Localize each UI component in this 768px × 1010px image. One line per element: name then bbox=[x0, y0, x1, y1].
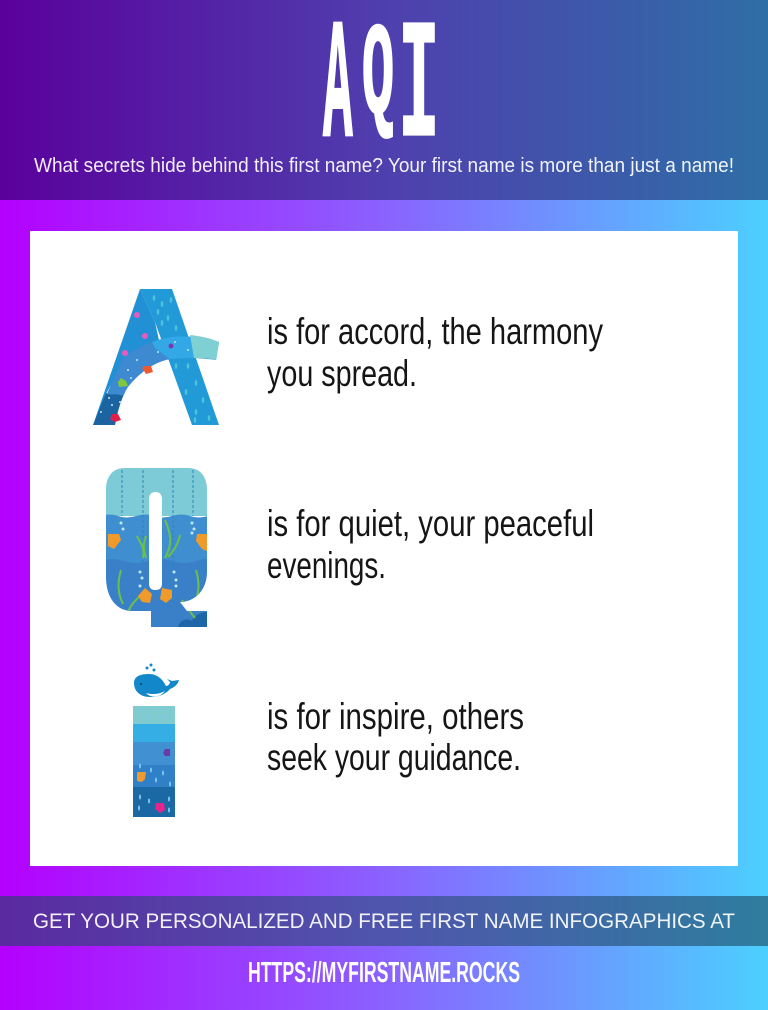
footer url: HTTPS://MYFIRSTNAME.ROCKS bbox=[248, 957, 520, 989]
icon: whale bbox=[134, 664, 179, 697]
text: A line: is for accord, the harmony bbox=[267, 311, 603, 352]
text: Q line: evenings. bbox=[267, 545, 386, 586]
icon: letter I bbox=[133, 706, 175, 817]
text: A line: you spread. bbox=[267, 353, 417, 394]
title: I bbox=[398, 0, 440, 187]
text: I line bbox=[267, 696, 524, 778]
icon: letter Q bbox=[106, 468, 207, 627]
footer call-to-action band bbox=[0, 896, 768, 946]
text: Q line: is for quiet, your peaceful bbox=[267, 503, 594, 544]
text: A line bbox=[267, 311, 603, 394]
text: Q line bbox=[267, 503, 594, 586]
title: Q bbox=[362, 3, 394, 151]
main white panel bbox=[30, 231, 738, 866]
footer call-to-action band: GET YOUR PERSONALIZED AND FREE FIRST NAME INFOGRAPHICS AT bbox=[33, 909, 735, 933]
title bbox=[323, 0, 440, 187]
text: I line: seek your guidance. bbox=[267, 737, 521, 778]
header band bbox=[0, 0, 768, 200]
subtitle: What secrets hide behind this first name? Your first name is more than just a name! bbox=[34, 155, 734, 177]
text: I line: is for inspire, others bbox=[267, 696, 524, 737]
icon: letter A bbox=[93, 289, 219, 425]
